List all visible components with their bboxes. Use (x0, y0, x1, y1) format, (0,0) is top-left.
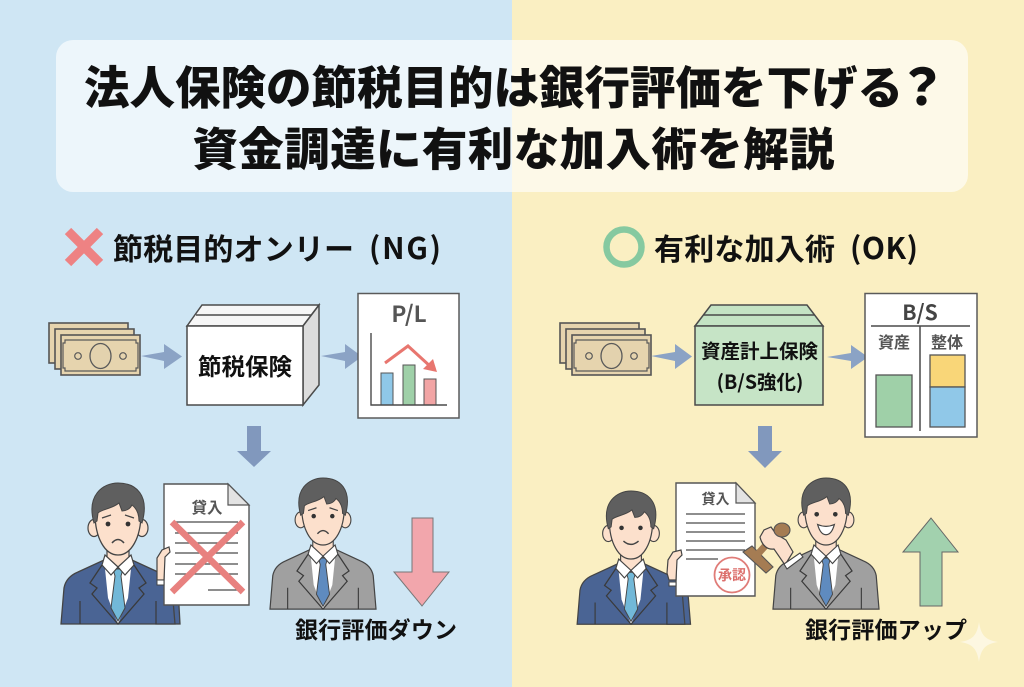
panel: OK flow (560, 224, 998, 662)
document: balance sheet (865, 294, 977, 437)
person: worried banker (270, 478, 376, 609)
person: smiling applicant (577, 491, 691, 624)
B/S label: B/S (902, 297, 938, 327)
arrow: money to insurance (651, 344, 692, 369)
red cross (172, 522, 243, 592)
arrow: insurance to P/L (321, 344, 362, 369)
hand holding document (667, 550, 682, 586)
panel: NG flow (49, 224, 459, 645)
column label: total: 整体 (931, 329, 963, 353)
icon: banknotes (49, 323, 140, 375)
arrow: down (748, 426, 782, 468)
heading suffix: NG: (NG) (369, 224, 441, 268)
left background: blue (0, 0, 512, 687)
box: tax saving insurance (187, 305, 319, 405)
arrow: rating up (903, 518, 958, 606)
stamper knob (774, 523, 790, 537)
heading suffix: OK: (OK) (850, 224, 918, 268)
heading: NG: 節税目的オンリー (113, 225, 354, 269)
heading icon: green circle (606, 230, 642, 264)
sparkle (960, 622, 998, 662)
document: rejected loan (164, 484, 249, 605)
document: P/L chart (358, 294, 459, 418)
box label: 節税保険 (198, 348, 292, 382)
arrow: down (237, 426, 271, 467)
person: smiling banker (773, 478, 879, 609)
document heading: 貸入 (191, 496, 223, 518)
stamper base (743, 535, 775, 573)
arrow: insurance to B/S (827, 345, 868, 369)
P/L label: P/L (391, 297, 427, 329)
total stacked bar (930, 355, 965, 427)
hand holding document (157, 547, 170, 585)
title line 1: 法人保険の節税目的は銀行評価を下げる (84, 52, 903, 118)
shirt cuff (784, 553, 803, 569)
asset bar (876, 375, 912, 427)
hand gripping stamper (760, 527, 793, 565)
title line 2: 資金調達に有利な加入術を解説 (192, 114, 835, 180)
right background: yellow (512, 0, 1024, 687)
trend arrow (385, 346, 437, 372)
document heading: 貸入 (702, 489, 730, 509)
title question mark: ？ (897, 48, 947, 120)
label: rating up: 銀行評価アップ (805, 611, 967, 645)
column label: assets: 資産 (878, 329, 910, 353)
icon: banknotes (560, 323, 651, 375)
arrow: money to insurance (141, 344, 182, 369)
arrow: rating down (394, 518, 449, 606)
heading: OK: 有利な加入術 (654, 225, 835, 269)
label: rating down: 銀行評価ダウン (295, 611, 457, 645)
heading icon: red cross (68, 231, 100, 263)
title panel (56, 40, 968, 192)
bars (381, 365, 436, 405)
approval seal: 承認 (718, 565, 746, 585)
document: approved loan (676, 483, 755, 596)
box label line 1: 資産計上保険 (701, 335, 818, 364)
person: worried applicant (61, 483, 180, 624)
box label line 2: (B/S強化) (717, 366, 803, 395)
stamp and hand (743, 523, 803, 573)
box: asset insurance (695, 305, 823, 405)
